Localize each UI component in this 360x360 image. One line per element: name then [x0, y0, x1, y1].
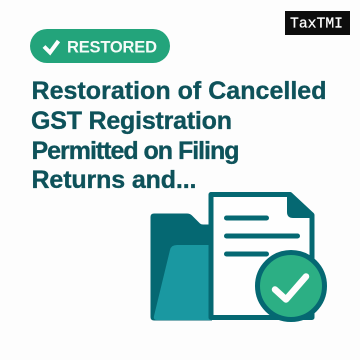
folder back — [150, 214, 212, 320]
folder front — [154, 245, 212, 320]
badge: restored: RESTORED — [67, 38, 157, 56]
title — [31, 77, 326, 194]
icon: folder with document and check — [150, 193, 324, 320]
title: GST Registration — [31, 107, 232, 135]
document line 2 — [224, 234, 300, 238]
badge: restored — [30, 29, 170, 63]
title: Restoration of Cancelled — [32, 77, 326, 105]
title: Returns and... — [32, 166, 196, 194]
document line 1 — [224, 216, 269, 220]
logo: TaxTMI — [285, 11, 350, 35]
document line 3 — [224, 252, 269, 256]
document — [211, 194, 312, 318]
logo: TaxTMI: TaxTMI — [290, 16, 343, 32]
check badge — [258, 252, 324, 320]
title: Permitted on Filing — [32, 137, 240, 165]
document fold — [287, 193, 314, 218]
